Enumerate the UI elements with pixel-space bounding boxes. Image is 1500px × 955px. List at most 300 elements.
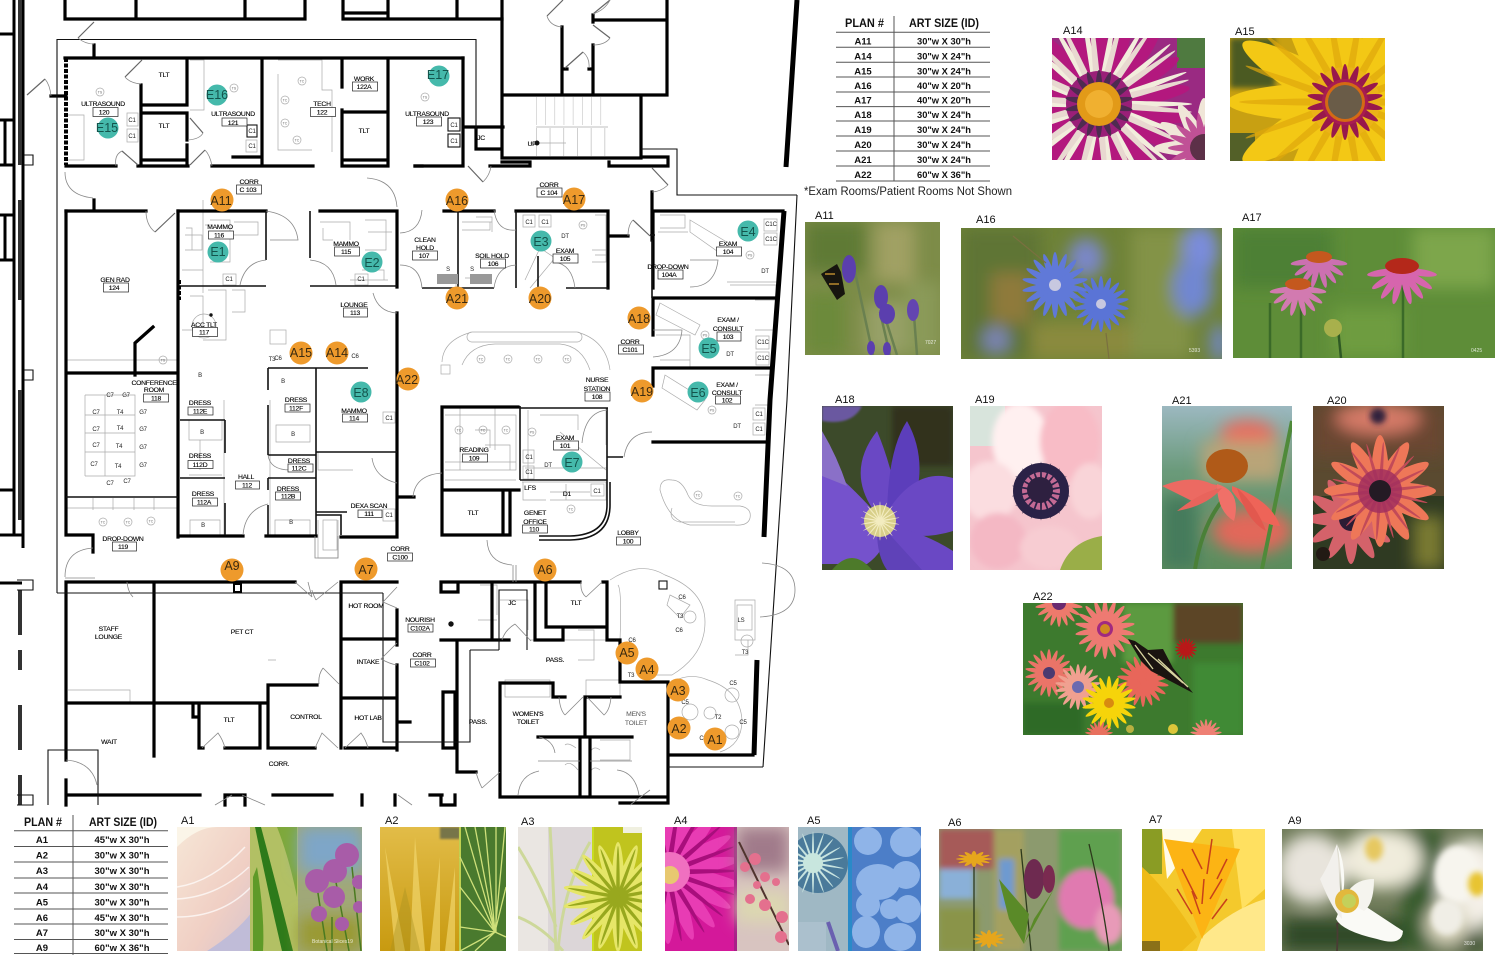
room labels: INTAKE [357, 659, 380, 666]
photo A6: wildflowers with pink blossoms [939, 829, 1122, 951]
art location markers: A6 [537, 563, 553, 577]
room labels: 124 [109, 285, 120, 292]
fixture labels: T3 [742, 650, 749, 656]
room labels: 100 [623, 538, 634, 546]
table: art sizes A1 to A9: A5 [36, 898, 49, 908]
desks and chairs: TC [736, 494, 741, 498]
room labels: 116 [214, 232, 225, 240]
table: art sizes A11 to A22: 30"w X 24"h [917, 66, 971, 78]
room labels: ACC TLT [191, 322, 217, 329]
photo A1: ranunculus, grass, chives triptych: Botanical Slices19 [312, 939, 353, 945]
fixture labels: C6 [628, 638, 636, 644]
exam room markers: E5 [701, 342, 717, 356]
fixture labels: C1 [525, 455, 533, 461]
fixture labels: DT [544, 463, 552, 469]
photo labels: A16 [976, 214, 996, 226]
room labels: 111 [364, 511, 374, 518]
room labels: ULTRASOUND [211, 111, 255, 118]
table: art sizes A11 to A22: A11 [855, 36, 872, 48]
art location markers: A16 [446, 194, 468, 208]
fixture labels: T2 [715, 715, 722, 721]
fixture labels: S [470, 267, 474, 273]
fixture labels: B [281, 379, 285, 385]
room labels: 115 [341, 249, 352, 256]
desks and chairs: TC [696, 494, 701, 498]
room labels: WORK [354, 76, 375, 83]
table: art sizes A11 to A22 [836, 16, 990, 181]
room labels: 108 [592, 394, 603, 401]
photo A14: magenta gazania [1052, 38, 1205, 160]
photo A3: pale stems and green chrysanthemum [518, 827, 642, 951]
photo A9: white anemone [1282, 829, 1483, 951]
room labels: LFS [524, 485, 537, 492]
art location markers: A20 [529, 292, 551, 306]
fixture labels: C5 [739, 720, 747, 726]
room labels: DRESS [277, 486, 300, 493]
room labels: SOIL HOLD [475, 253, 509, 260]
photo A16: blue chicory: 5393 [1189, 348, 1200, 354]
table: art sizes A11 to A22: 30"w X 24"h [917, 155, 971, 166]
table: art sizes A1 to A9: A6 [36, 913, 48, 924]
fixture labels: LS [738, 618, 745, 624]
room labels: TOILET [517, 719, 539, 726]
table: art sizes A1 to A9: ART SIZE (ID) [89, 817, 157, 829]
room labels: STATION [584, 386, 611, 393]
room labels: C102A [410, 626, 430, 632]
photo A11: butterfly on verbena: 7027 [925, 340, 936, 346]
room labels: C100 [392, 554, 408, 562]
room labels: JC [508, 600, 516, 607]
table: art sizes A1 to A9: A3 [36, 866, 48, 877]
table: art sizes A1 to A9: 30"w X 30"h [94, 850, 150, 862]
desks and chairs: TC [283, 122, 288, 126]
photo labels [181, 25, 1347, 829]
room labels: STAFF [99, 626, 118, 633]
room labels: DRESS [285, 397, 308, 404]
footnote: *Exam Rooms/Patient Rooms Not Shown [804, 186, 1012, 198]
room labels: 112A [197, 500, 212, 506]
table: art sizes A11 to A22: A21 [854, 155, 872, 166]
table: art sizes A11 to A22: ART SIZE (ID) [909, 18, 979, 30]
exam room markers [96, 66, 758, 472]
photo labels: A5 [807, 815, 820, 827]
desks and chairs: TS [98, 90, 103, 94]
desks and chairs: TC [506, 358, 511, 362]
desks and chairs: TC [283, 98, 288, 102]
room labels: CORR [620, 339, 640, 346]
room labels: OFFICE [523, 519, 547, 526]
room labels: MAMMO [333, 241, 359, 248]
photo labels: A11 [815, 210, 834, 222]
room labels: 114 [349, 416, 360, 422]
table: art sizes A11 to A22: PLAN # [845, 18, 885, 30]
exam room markers: E2 [364, 256, 380, 270]
desks and chairs: TS [232, 86, 237, 90]
photo labels: A15 [1235, 26, 1255, 38]
photo labels: A9 [1288, 815, 1301, 827]
room labels: PASS. [469, 719, 487, 726]
fixture labels: T4 [117, 426, 124, 432]
photo A21: coral coneflower [1162, 406, 1292, 569]
art location markers: A1 [707, 733, 723, 747]
fixture labels [90, 113, 778, 742]
room labels: LOUNGE [95, 634, 123, 641]
table: art sizes A1 to A9: 30"w X 30"h [94, 882, 150, 893]
room labels: CORR. [269, 761, 290, 768]
room labels: 112B [281, 494, 296, 500]
fixture labels: T3 [628, 673, 635, 679]
room labels: 118 [151, 396, 162, 402]
table: art sizes A1 to A9: A4 [36, 882, 49, 893]
photo A16: blue chicory [961, 228, 1222, 359]
room labels: 103 [723, 334, 734, 341]
art location markers: A5 [619, 646, 635, 660]
exam room markers: E7 [564, 456, 580, 470]
light furniture and fixtures [66, 60, 778, 772]
fixture labels: C5 [681, 700, 689, 706]
room labels: 104A [662, 272, 677, 279]
room labels: CLEAN [414, 237, 436, 244]
room labels: 112D [193, 462, 208, 469]
fixture labels: C1 [128, 118, 136, 124]
room labels: NOURISH [405, 617, 435, 624]
table: art sizes A1 to A9: A2 [36, 850, 48, 862]
fixture labels: C5 [729, 681, 737, 687]
table: art sizes A1 to A9: A9 [36, 943, 48, 954]
room labels: PASS. [546, 657, 564, 664]
room labels: 101 [560, 443, 571, 450]
fixture labels: C1 [385, 416, 393, 422]
room labels: TLT [159, 72, 170, 79]
fixture labels: C7 [92, 427, 100, 433]
table: art sizes A1 to A9: 30"w X 30"h [94, 928, 150, 939]
walls [0, 0, 797, 805]
fixture labels: DT [561, 234, 569, 240]
photo labels: A1 [181, 815, 194, 827]
room labels: 122 [317, 110, 328, 116]
room labels: TLT [159, 123, 170, 130]
room labels: DROP-DOWN [102, 536, 144, 543]
room labels: CORR [239, 179, 259, 186]
table: art sizes A1 to A9: 60"w X 36"h [94, 943, 150, 954]
room labels: TOILET [625, 720, 647, 727]
fixture labels: T4 [117, 410, 124, 416]
room labels: 110 [529, 526, 540, 534]
fixture labels: C1C [765, 222, 778, 228]
table: art sizes A11 to A22: 40"w X 20"h [917, 81, 971, 92]
photo labels: A14 [1063, 25, 1083, 37]
room labels: HOLD [416, 245, 434, 252]
desks and chairs: TC [536, 358, 541, 362]
room labels: EXAM [556, 248, 575, 255]
fixture labels: C1 [450, 123, 458, 129]
room labels: DRESS [288, 458, 311, 465]
room labels: DRESS [189, 400, 212, 407]
room labels: TLT [468, 510, 479, 517]
fixture labels: B [200, 430, 204, 436]
room labels: JC [477, 135, 485, 142]
art location markers: A21 [446, 292, 468, 306]
room labels: 107 [419, 253, 430, 260]
art location markers: A17 [563, 193, 585, 207]
art location markers: A4 [639, 663, 655, 677]
fixture labels: G7 [122, 393, 131, 399]
room labels: 120 [99, 110, 110, 116]
table: art sizes A11 to A22: A17 [854, 96, 872, 106]
table: art sizes A1 to A9: 30"w X 30"h [94, 898, 150, 908]
desks and chairs: TC [504, 428, 509, 432]
exam room markers: E3 [533, 235, 549, 249]
fixture labels: C1 [755, 412, 763, 418]
fixture labels: B [291, 432, 295, 438]
room labels: CONFERENCE [131, 380, 177, 387]
room labels: EXAM / [717, 317, 739, 324]
art location markers: A7 [358, 563, 374, 577]
exam room markers: E16 [206, 88, 228, 102]
room labels: EXAM / [716, 382, 738, 389]
fixture labels: C7 [123, 479, 131, 485]
desks and chairs: TC [126, 520, 131, 524]
room labels: DRESS [189, 453, 212, 460]
photo A4: magenta gerbera and pink blossom [665, 827, 789, 951]
art location markers: A14 [326, 346, 348, 360]
fixture labels: T3 [269, 357, 276, 363]
fixture labels: B [201, 523, 205, 529]
room labels: CONSULT [712, 390, 742, 397]
fixture labels: G7 [139, 427, 148, 433]
desks and chairs: TC [479, 358, 484, 362]
desks and chairs: TC [565, 358, 570, 362]
table: art sizes A1 to A9 [14, 815, 168, 955]
room labels: GEN RAD [100, 277, 130, 284]
room labels: UP [528, 141, 537, 148]
fixture labels: DT [733, 424, 741, 430]
room labels: 113 [350, 310, 361, 317]
room labels: CORR [539, 182, 559, 189]
room labels: WAIT [101, 739, 117, 746]
room labels: LOUNGE [340, 302, 368, 309]
room labels [81, 72, 743, 768]
table: art sizes A11 to A22: A16 [854, 81, 872, 92]
table: art sizes A11 to A22: A19 [854, 125, 872, 136]
fixture labels: C1 [450, 139, 458, 145]
fixture labels: C6 [675, 628, 683, 634]
fixture labels: C1C [765, 237, 778, 243]
room labels: 112C [292, 466, 307, 472]
fixture labels: C1C [757, 356, 770, 362]
photo labels: A6 [948, 817, 961, 829]
desks and chairs: TC [101, 520, 106, 524]
room labels: CONSULT [713, 326, 743, 333]
room labels: READING [459, 447, 489, 454]
room labels: CORR [390, 546, 410, 553]
photo A5: dandelion and blue hydrangea [798, 827, 921, 951]
fixture labels: C7 [92, 443, 100, 449]
fixture labels: C1 [385, 513, 393, 519]
fixture labels: C1 [248, 129, 256, 135]
desks and chairs: PS [748, 254, 753, 258]
room labels: EXAM [719, 241, 738, 248]
room labels: 112F [289, 406, 303, 412]
fixture labels: C1 [128, 134, 136, 140]
room labels: LOBBY [617, 530, 639, 537]
room labels: TLT [359, 128, 370, 135]
exam room markers: E4 [740, 225, 756, 239]
fixture labels: G7 [139, 463, 148, 469]
room labels: 112E [193, 408, 208, 416]
room labels: 106 [488, 261, 499, 268]
room labels: 112 [242, 482, 253, 490]
room labels: CORR [412, 652, 432, 659]
table: art sizes A11 to A22: 30"w X 24"h [917, 52, 971, 62]
photo labels: A2 [385, 815, 398, 827]
table: art sizes A1 to A9: A7 [36, 928, 48, 939]
fixture labels: C7 [90, 462, 98, 468]
art location markers: A15 [290, 346, 312, 360]
photo labels: A3 [521, 816, 534, 828]
art location markers [210, 188, 726, 750]
art location markers: A3 [670, 684, 686, 698]
table: art sizes A11 to A22: 30"w X 24"h [917, 140, 971, 151]
table: art sizes A11 to A22: 30"w X 24"h [917, 110, 971, 121]
room labels: C 104 [541, 190, 558, 197]
photo A17: pink coneflowers [1233, 228, 1495, 358]
table: art sizes A11 to A22: 30"w X 24"h [917, 125, 971, 136]
room labels: 123 [423, 119, 434, 126]
table: art sizes A1 to A9: A1 [36, 835, 49, 846]
desks and chairs: PS [530, 430, 535, 434]
table: art sizes A11 to A22: 30"w X 30"h [917, 36, 971, 48]
photo A20: coral african daisy [1313, 406, 1444, 569]
desks and chairs: TC [569, 508, 574, 512]
photo A2: yellow petals and palm [380, 827, 506, 951]
photo labels: A17 [1242, 212, 1262, 224]
fixture labels: C1 [593, 489, 601, 495]
room labels: 121 [228, 120, 239, 127]
photo labels: A19 [975, 394, 995, 406]
room labels: GENET [524, 510, 546, 517]
photo A18: purple clematis [822, 406, 953, 570]
desks and chairs [96, 77, 754, 739]
photo A15: yellow daisy [1230, 38, 1385, 161]
art location markers: A22 [396, 373, 418, 387]
room labels: 122A [357, 84, 372, 91]
room labels: ULTRASOUND [81, 101, 125, 108]
photo A9: white anemone: 3030 [1464, 941, 1475, 947]
room labels: HOT LAB [354, 715, 382, 722]
desks and chairs: PS [710, 408, 715, 412]
photo A1: ranunculus, grass, chives triptych [177, 827, 362, 951]
desks and chairs: TS [423, 96, 428, 100]
room labels: TLT [571, 600, 582, 607]
fixture labels: G7 [139, 410, 148, 416]
photo A22: daisies and zebra butterfly [1023, 603, 1243, 735]
desks and chairs: TC [149, 520, 154, 524]
fixture labels: C6 [678, 595, 686, 601]
table: art sizes A11 to A22: A18 [854, 110, 872, 121]
room labels: CONTROL [290, 714, 322, 721]
room labels: 119 [118, 544, 129, 551]
desks and chairs: TC [300, 80, 305, 84]
fixture labels: C5 [699, 736, 707, 742]
fixture labels: C1 [755, 427, 763, 433]
fixture labels: DT [761, 269, 769, 275]
table: art sizes A11 to A22: 60"w X 36"h [917, 170, 971, 181]
exam room markers: E17 [427, 68, 449, 82]
exam room markers: E8 [353, 386, 369, 400]
room labels: C 103 [240, 187, 257, 194]
table: art sizes A11 to A22: A22 [854, 170, 872, 181]
room labels: DROP-DOWN [647, 264, 689, 271]
room labels: NURSE [586, 377, 609, 384]
photo labels: A4 [674, 815, 687, 827]
room labels: ROOM [144, 387, 165, 394]
fixture labels: T3 [677, 614, 684, 620]
fixture labels: S [446, 267, 450, 273]
fixture labels: C1 [357, 277, 365, 283]
art location markers: A9 [224, 559, 240, 573]
room labels: 117 [199, 330, 210, 336]
fixture labels: C1 [525, 220, 533, 226]
room labels: C102 [414, 660, 430, 668]
room labels: DEXA SCAN [351, 503, 388, 510]
fixture labels: C7 [106, 481, 114, 487]
photo labels: A7 [1149, 814, 1162, 826]
desks and chairs: PS [703, 334, 708, 338]
fixture labels: G7 [139, 445, 148, 451]
table: art sizes A11 to A22: A20 [854, 140, 872, 151]
photo A11: butterfly on verbena [805, 222, 940, 355]
room labels: 105 [560, 256, 571, 263]
desks and chairs: TC [481, 428, 486, 432]
room labels: 109 [469, 456, 480, 462]
art location markers: A19 [631, 385, 653, 399]
floor plan [0, 0, 797, 805]
fixture labels: B [198, 373, 202, 379]
exam room markers: E15 [96, 121, 118, 135]
room labels: TLT [224, 717, 235, 724]
photo labels: A18 [835, 394, 855, 406]
room labels: ULTRASOUND [405, 111, 449, 118]
fixture labels: DT [726, 352, 734, 358]
art location markers: A18 [628, 312, 650, 326]
exam room markers: E1 [210, 245, 226, 259]
room labels: MEN'S [626, 711, 647, 718]
room labels: 102 [722, 398, 733, 404]
room labels: MAMMO [341, 408, 367, 415]
table: art sizes A1 to A9: 45"w X 30"h [94, 913, 150, 924]
table: art sizes A11 to A22: A14 [854, 52, 872, 62]
photo labels: A21 [1172, 395, 1192, 407]
fixture labels: C1C [757, 340, 770, 346]
fixture labels: C6 [351, 354, 359, 360]
room labels: 104 [723, 249, 734, 256]
art location markers: A2 [671, 722, 687, 736]
fixture labels: B [289, 520, 293, 526]
art location markers: A11 [210, 194, 232, 208]
room labels: DRESS [192, 491, 215, 498]
room labels: WOMEN'S [513, 711, 544, 718]
desks and chairs: TC [295, 138, 300, 142]
fixture labels: C7 [106, 393, 114, 399]
room labels: TECH [313, 101, 331, 108]
room labels: EXAM [556, 435, 575, 442]
room labels: PET CT [231, 629, 253, 636]
table: art sizes A1 to A9: 45"w X 30"h [94, 835, 150, 846]
exam room markers: E6 [690, 386, 706, 400]
desks and chairs: TC [457, 428, 462, 432]
desks and chairs: TS [161, 358, 166, 362]
